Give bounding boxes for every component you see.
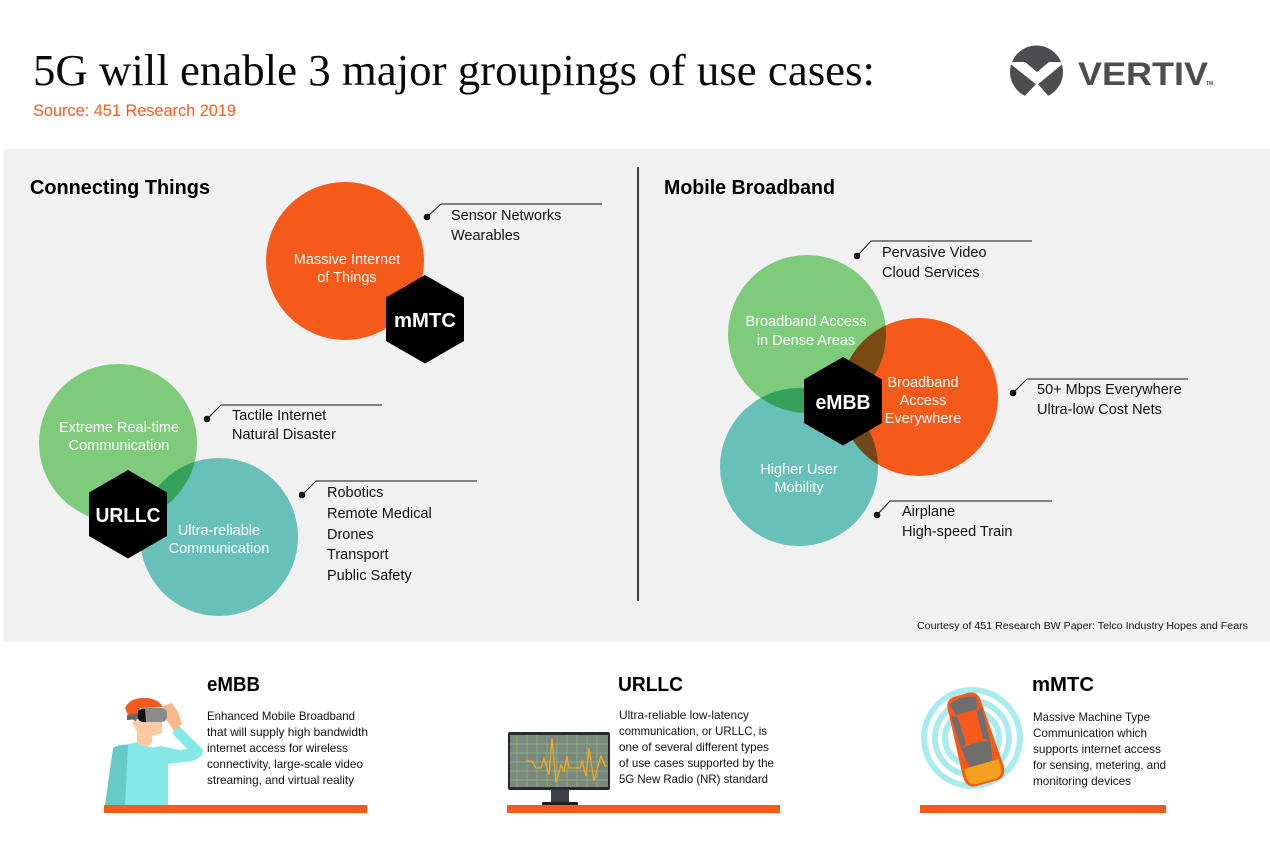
description [1033,711,1166,788]
description: supports internet access [1033,743,1161,756]
callout: robotics: Public Safety [327,568,412,584]
callout: pervasive video: Cloud Services [882,265,980,281]
title: 5G will enable 3 major groupings of use cases: [33,45,875,95]
logo: Vertiv [1008,46,1213,99]
circle: Broadband Access Everywhere [840,318,998,476]
description: one of several different types [619,741,769,754]
callout: airplane: High-speed Train [902,524,1012,540]
callout: airplane: Airplane [902,504,955,520]
callout: tactile internet [204,405,382,443]
heading: Connecting Things: Connecting Things [30,176,210,199]
label: Broadband Access Everywhere: Broadband [888,375,958,391]
callout: 50+ Mbps [1010,379,1188,418]
label: Ultra-reliable Communication [169,523,269,557]
hexagon: mMTC [386,275,464,364]
label: Higher User Mobility: Mobility [774,480,824,496]
bar [104,805,367,813]
label: Broadband Access Everywhere [885,375,961,427]
callout: robotics: Robotics [327,485,383,501]
icon: person with VR headset [105,698,203,805]
description [207,710,368,787]
bar [507,805,780,813]
diagram: mMTC [266,182,602,364]
heading: eMBB [207,674,260,696]
circle: Massive Internet of Things: of Things [317,270,377,286]
circle: Broadband Access in Dense Areas [728,255,886,413]
description: streaming, and virtual reality [207,774,354,787]
hexagon: mMTC: mMTC [394,310,456,332]
hexagon: URLLC [89,470,167,558]
panel: use case diagram background [3,149,1270,642]
description: for sensing, metering, and [1033,759,1166,772]
callout: 50+ Mbps: Ultra-low Cost Nets [1037,402,1162,418]
callout: tactile internet: Tactile Internet [232,408,326,424]
diagram: URLLC [39,364,477,616]
description: Ultra-reliable low-latency [619,709,749,722]
label: Broadband Access in Dense Areas: in Dense Areas [757,333,855,349]
label: Higher User Mobility [760,462,838,496]
description: Massive Machine Type [1033,711,1150,724]
heading: URLLC [618,674,683,696]
block: eMBB [104,674,368,813]
hexagon: eMBB: eMBB [816,392,870,414]
description: Communication which [1033,727,1147,740]
label: Broadband Access in Dense Areas: Broadband Access [746,314,866,330]
overlap: green and orange [849,326,886,375]
icon: monitor with waveform [508,732,610,805]
logo: Vertiv: TM [1206,81,1213,87]
callout: pervasive video [854,241,1032,281]
source line: Source: 451 Research 2019 [33,102,236,120]
description: internet access for wireless [207,742,348,755]
logo: Vertiv: VERTIV [1078,56,1209,92]
heading: mMTC [1032,674,1094,696]
heading: Mobile Broadband: Mobile Broadband [664,176,835,199]
overlap: green and teal [760,388,804,413]
label: Extreme Real-time Communication [59,420,179,454]
callout: robotics: Transport [327,547,389,563]
label: Ultra-reliable Communication: Communication [169,541,269,557]
overlap: teal and orange [852,430,878,464]
circle: Higher User Mobility [720,388,878,546]
description: Enhanced Mobile Broadband [207,710,355,723]
overlap [158,462,195,505]
hexagon: URLLC: URLLC [96,505,160,527]
description: of use cases supported by the [619,757,774,770]
callout: robotics: Drones [327,527,374,543]
description: communication, or URLLC, is [619,725,767,738]
description: monitoring devices [1033,775,1131,788]
circle: Massive Internet of Things: Massive Internet [294,252,400,268]
circle: Ultra-reliable Communication [140,458,298,616]
label: Ultra-reliable Communication: Ultra-reliable [178,523,260,539]
label: Broadband Access Everywhere: Access [900,393,946,409]
icon: car with signal rings [924,689,1020,789]
label: Extreme Real-time Communication: Communication [69,438,169,454]
description: that will supply high bandwidth [207,726,368,739]
callout: robotics: Remote Medical [327,506,432,522]
label: Higher User Mobility: Higher User [760,462,838,478]
callout: sensor networks: Wearables [451,228,520,244]
diagram: eMBB [720,241,1188,546]
callout: 50+ Mbps: 50+ Mbps Everywhere [1037,382,1182,398]
label: Broadband Access Everywhere: Everywhere [885,411,961,427]
credit: Courtesy of 451 Research BW Paper: Telco Industry Hopes and Fears [917,620,1248,632]
circle: Extreme Real-time Communication [39,364,197,522]
panel divider [637,167,639,601]
block: mMTC [920,674,1166,813]
circle: Massive Internet of Things [266,182,424,340]
callout: sensor networks: Sensor Networks [451,208,561,224]
description: 5G New Radio (NR) standard [619,773,768,786]
callout: sensor networks [424,204,602,244]
callout: pervasive video: Pervasive Video [882,245,987,261]
block: URLLC [507,674,780,813]
hexagon: eMBB [804,357,882,446]
callout: tactile internet: Natural Disaster [232,427,336,443]
description: connectivity, large-scale video [207,758,363,771]
label: Broadband Access in Dense Areas [746,314,866,349]
label: Extreme Real-time Communication: Extreme Real-time [59,420,179,436]
description [619,709,774,786]
bar [920,805,1166,813]
callout: robotics [299,481,477,584]
callout: airplane [874,501,1052,540]
